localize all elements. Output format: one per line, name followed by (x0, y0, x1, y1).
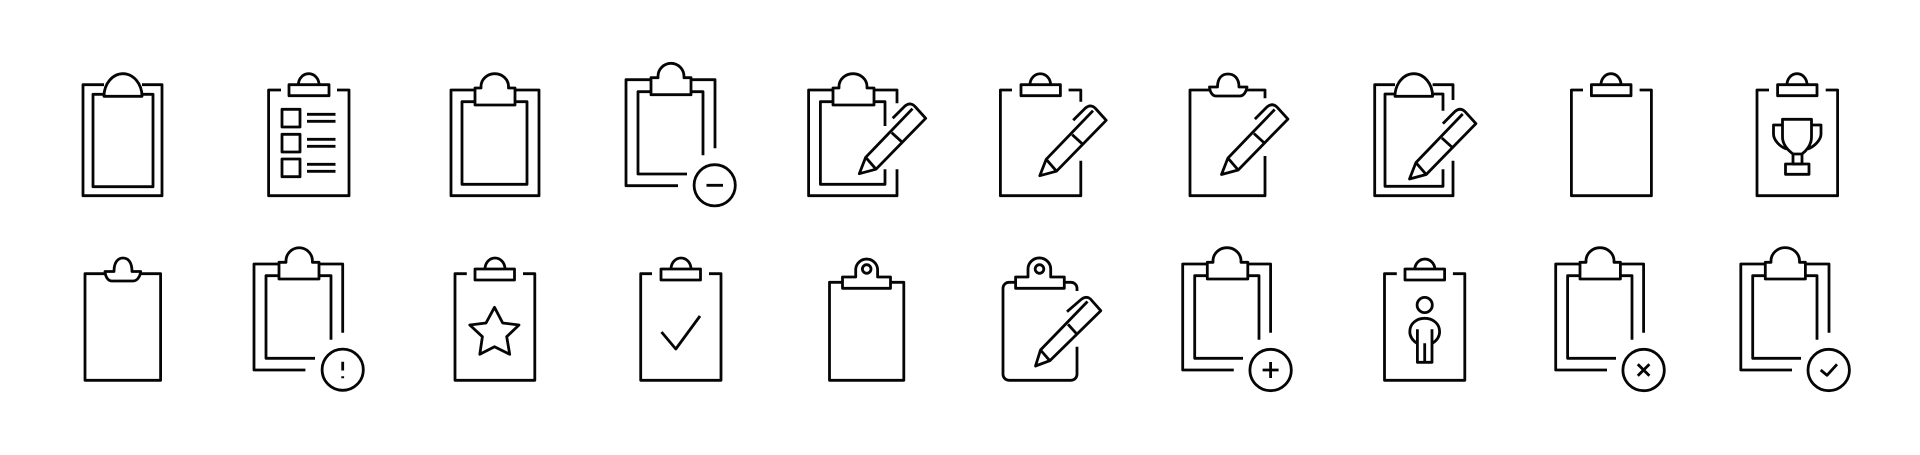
pen (1036, 297, 1101, 366)
icon: clipboard with pen and rounded clip (1190, 74, 1288, 196)
person (1410, 297, 1440, 362)
pen (1040, 106, 1106, 176)
icon: clipboard with check mark (641, 258, 721, 380)
icon: clipboard with person (1384, 259, 1465, 380)
pen (859, 104, 926, 174)
icon: clipboard with minus badge (626, 63, 735, 206)
icon: clipboard with inner sheet and stepped clip (451, 74, 539, 196)
icon: blank clipboard with rounded clip (85, 258, 161, 380)
icon: rounded clipboard with ring clip and pen (1003, 258, 1101, 380)
icon: double-border clipboard with dome clip and pen (1375, 74, 1476, 196)
icon: double-border clipboard with pen (809, 74, 926, 196)
icon: clipboard with cross badge (1556, 248, 1664, 391)
icon: clipboard with check badge (1741, 248, 1849, 391)
icon: clipboard with exclamation badge (254, 248, 363, 390)
icon: blank clipboard with flat clip (1571, 74, 1651, 196)
icon: clipboard with ring clip (830, 259, 904, 380)
icon: clipboard with star (455, 258, 535, 380)
pen (1222, 105, 1288, 174)
trophy (1774, 119, 1821, 174)
icon: clipboard with pen and flat clip (1000, 74, 1106, 196)
pen (1410, 109, 1476, 179)
icon: clipboard with plus badge (1183, 248, 1291, 391)
icon: clipboard checklist (269, 74, 349, 196)
icon: clipboard with trophy (1757, 74, 1838, 196)
star (470, 307, 519, 354)
icon: clipboard with double border and dome clip (83, 74, 162, 196)
